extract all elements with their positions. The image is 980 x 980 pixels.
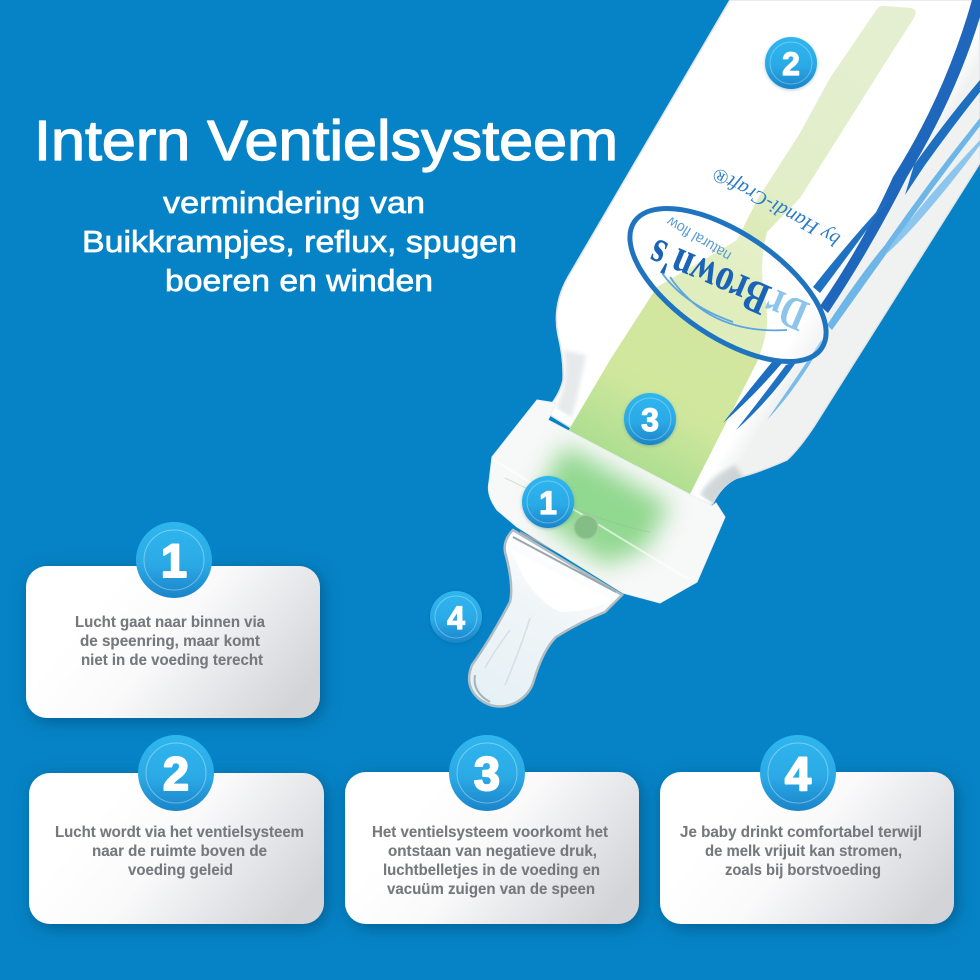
badge: bottle marker 3 <box>624 393 676 445</box>
step 2 badge <box>138 735 214 811</box>
title: Intern Ventielsysteem <box>34 109 618 173</box>
tagline: by Handi-Craft: by Handi-Craft® <box>709 163 844 251</box>
step 2 text: voeding geleid <box>128 862 233 879</box>
step 3 badge: 3 <box>474 747 500 800</box>
collar ring <box>488 400 725 603</box>
panel: step 1 <box>26 522 320 718</box>
step 3 text: Het ventielsysteem voorkomt het <box>372 824 608 841</box>
step 2 badge: 2 <box>163 747 189 800</box>
step 3 text: luchtbelletjes in de voeding en <box>383 862 600 879</box>
step 1 badge <box>136 522 212 598</box>
vent hole <box>574 515 598 539</box>
logo: Dr. Brown's: natural flow <box>664 213 734 264</box>
step 1 text: Lucht gaat naar binnen via <box>75 614 265 631</box>
step 2 text: Lucht wordt via het ventielsysteem <box>55 824 304 841</box>
badge: bottle marker 4 <box>430 591 482 643</box>
panel: step 2 <box>29 735 324 924</box>
badge: bottle marker 2 <box>765 37 817 89</box>
step 4 text: zoals bij borstvoeding <box>725 862 881 879</box>
step 1 text: de speenring, maar komt <box>80 633 260 650</box>
badge: bottle marker 1 <box>522 476 574 528</box>
step 3 text: ontstaan van negatieve druk, <box>388 843 597 860</box>
green vent tube <box>567 6 915 500</box>
subtitle: Buikkrampjes, reflux, spugen <box>82 224 517 259</box>
subtitle <box>82 185 517 298</box>
step 4 badge <box>760 735 836 811</box>
panel: step 3 <box>345 735 639 924</box>
badge: bottle marker 1: 1 <box>539 485 557 521</box>
teat <box>469 530 622 707</box>
badge: bottle marker 4: 4 <box>447 600 465 636</box>
step 1 text <box>75 614 265 669</box>
step 4 text <box>680 824 922 879</box>
step 4 text: Je baby drinkt comfortabel terwijl <box>680 824 922 841</box>
step 2 text: naar de ruimte boven de <box>92 843 267 860</box>
subtitle: vermindering van <box>163 185 425 220</box>
step 3 text: vacuüm zuigen van de speen <box>387 881 595 898</box>
step 4 text: de melk vrijuit kan stromen, <box>705 843 902 860</box>
badge: bottle marker 3: 3 <box>641 402 659 438</box>
panel: step 4 <box>660 735 954 924</box>
bottle neck shading <box>556 350 745 505</box>
bottle body <box>545 0 980 510</box>
swirl decoration <box>723 0 980 430</box>
badge: bottle marker 2: 2 <box>782 46 800 82</box>
step 3 text <box>372 824 608 898</box>
logo: Dr. Brown's <box>605 179 851 391</box>
step 1 text: niet in de voeding terecht <box>81 652 263 669</box>
logo: Dr. Brown's: DrBrown's <box>641 229 815 342</box>
step 2 text <box>55 824 304 879</box>
step 1 badge: 1 <box>161 534 187 587</box>
subtitle: boeren en winden <box>165 263 433 298</box>
step 3 badge <box>449 735 525 811</box>
illustration: baby bottle <box>469 0 980 707</box>
step 4 badge: 4 <box>785 747 811 800</box>
